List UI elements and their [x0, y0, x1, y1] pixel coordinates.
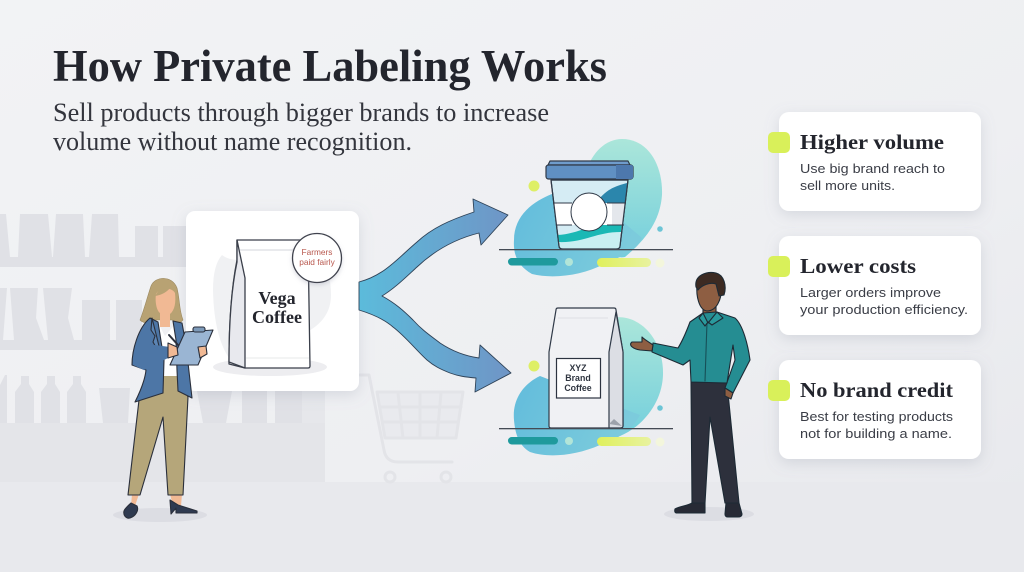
card heading: Higher volume	[800, 130, 944, 154]
arm	[133, 344, 170, 370]
pen	[169, 335, 178, 345]
teal shirt with arms	[652, 312, 750, 393]
bag name: Vega Coffee: Coffee	[252, 307, 302, 327]
panel: Lower costs	[768, 236, 981, 335]
card heading: Lower costs	[800, 254, 916, 278]
subtitle	[53, 98, 549, 156]
card body: Use big brand reach to	[800, 161, 945, 176]
shoes	[124, 503, 138, 518]
panel: No brand credit	[768, 360, 981, 459]
top shelf scene	[499, 139, 673, 276]
badge: Farmers paid fairly: Farmers	[302, 247, 332, 257]
bag name: Vega Coffee: Vega	[258, 288, 296, 308]
card body: not for building a name.	[800, 426, 952, 441]
subtitle: Sell products through bigger brands to increase	[53, 98, 549, 127]
collar	[699, 312, 723, 326]
subtitle: volume without name recognition.	[53, 127, 412, 156]
card body: your production efficiency.	[800, 302, 968, 317]
bottom shelf scene	[499, 308, 673, 455]
panel: Vega Coffee product card	[186, 211, 359, 391]
lime marker	[768, 380, 790, 401]
title: How Private Labeling Works	[53, 41, 607, 91]
lime marker	[768, 256, 790, 277]
badge: Farmers paid fairly: paid fairly	[299, 257, 336, 267]
ghost mug behind bag	[213, 255, 331, 362]
icon: Vega Coffee bag	[229, 240, 310, 368]
blue blob	[514, 193, 642, 276]
hand	[631, 337, 653, 351]
lapel	[151, 318, 162, 358]
lime marker	[768, 132, 790, 153]
arrows: branching from Vega card to both products	[359, 199, 511, 392]
card body: Best for testing products	[800, 409, 954, 424]
bag name: Vega Coffee	[252, 288, 302, 327]
woman with clipboard	[113, 278, 213, 522]
hands	[168, 343, 178, 358]
shelf line	[499, 428, 673, 429]
mint blob	[586, 139, 662, 257]
pocket hand	[725, 388, 733, 399]
pants	[128, 375, 188, 495]
icon: XYZ Brand Coffee bag	[549, 308, 623, 428]
face and neck	[156, 289, 175, 327]
hair	[696, 273, 725, 296]
hair	[140, 278, 183, 323]
accent dots and bars	[508, 180, 664, 268]
card body	[800, 161, 945, 193]
badge: Farmers paid fairly	[292, 234, 342, 282]
panel: Higher volume	[768, 112, 981, 211]
shirt	[158, 322, 178, 376]
icon: coffee cup	[546, 161, 633, 249]
shelf line	[499, 249, 673, 250]
bag label: XYZ Brand Coffee: Coffee	[564, 383, 592, 393]
neck and head	[703, 305, 716, 320]
bag shadow	[213, 358, 327, 376]
trousers	[691, 382, 739, 503]
shopping cart silhouette	[360, 375, 463, 482]
placket	[705, 322, 707, 381]
shoes	[675, 503, 705, 513]
card heading: No brand credit	[800, 378, 953, 402]
blue blob	[514, 376, 640, 455]
card body	[800, 409, 954, 441]
bag label: XYZ Brand Coffee	[556, 358, 600, 398]
bag label: XYZ Brand Coffee: XYZ	[569, 363, 587, 373]
bag label: XYZ Brand Coffee: Brand	[565, 373, 591, 383]
man presenting	[631, 273, 754, 521]
card body	[800, 285, 968, 317]
clipboard	[170, 330, 213, 365]
accent dots and bars	[508, 360, 664, 446]
card body: sell more units.	[800, 178, 895, 193]
card body: Larger orders improve	[800, 285, 941, 300]
mint blob	[600, 317, 663, 436]
ankles	[131, 494, 139, 506]
blazer	[132, 318, 164, 402]
